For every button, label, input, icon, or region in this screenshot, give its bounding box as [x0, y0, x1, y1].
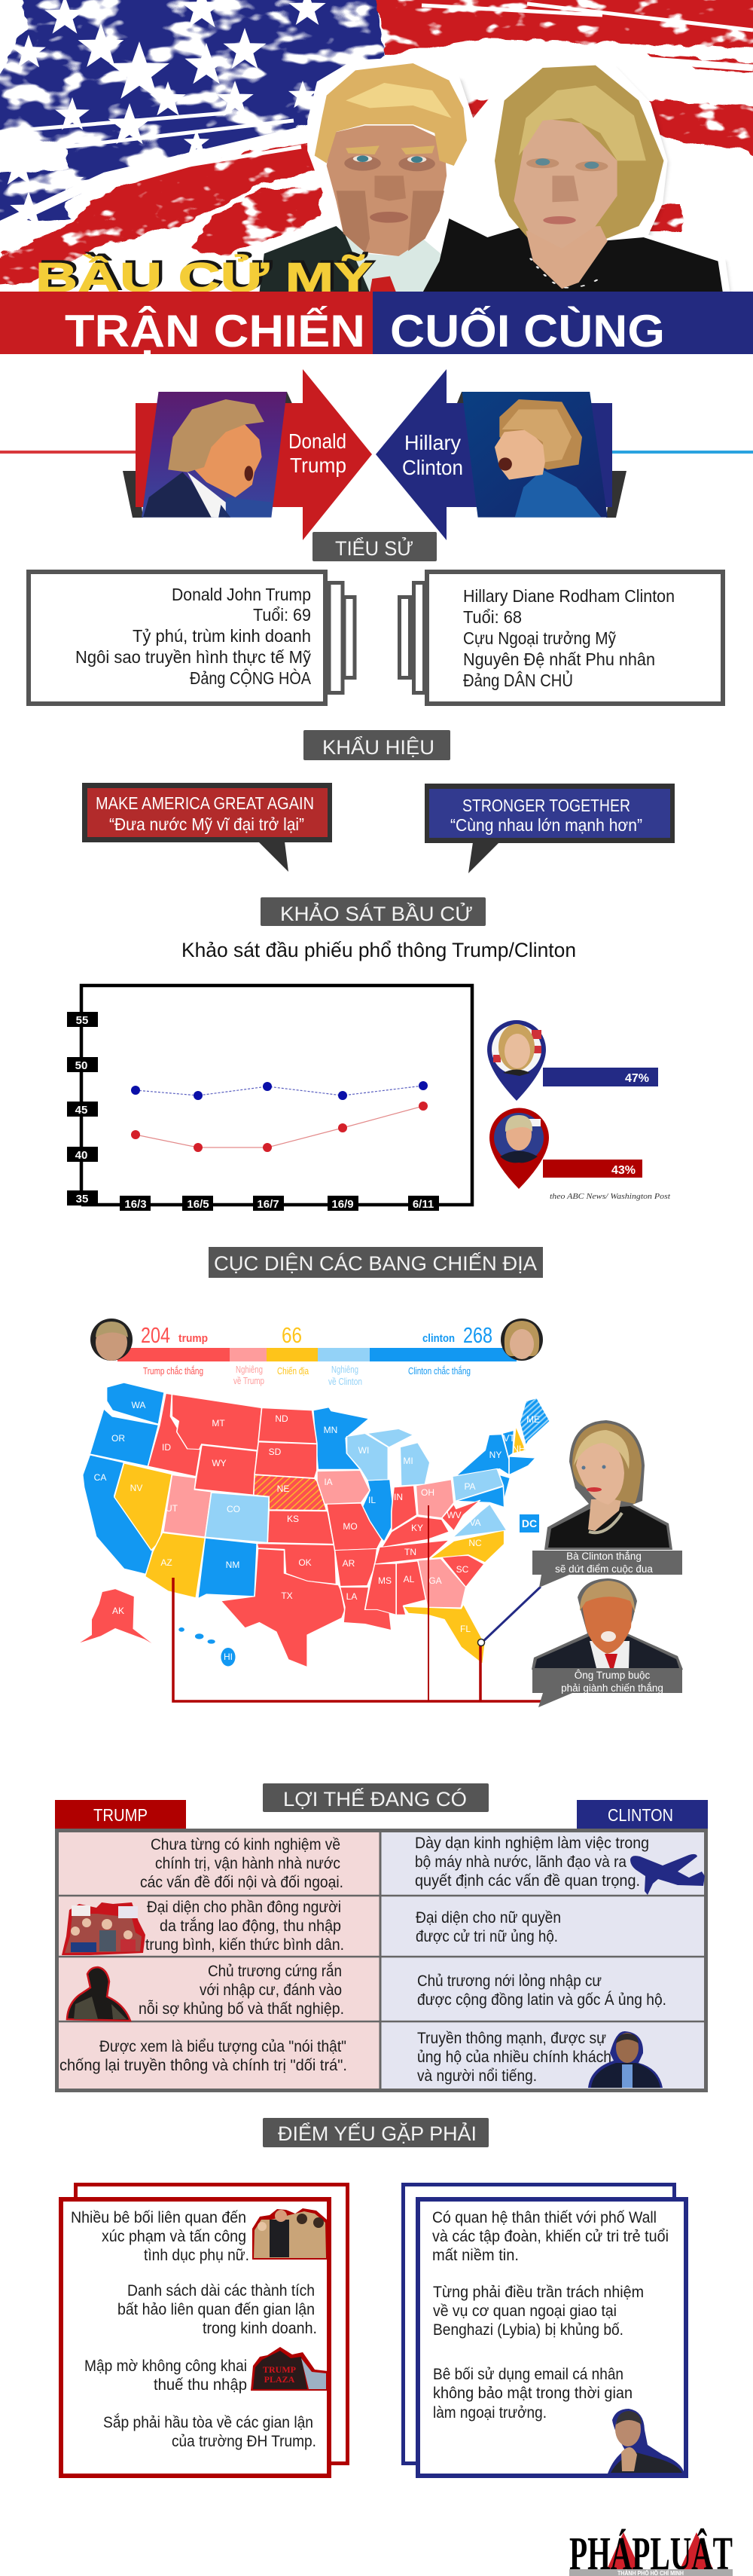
panel: Trump weaknesses: của trường ĐH Trump. — [172, 2433, 316, 2450]
heading: ĐIỂM YẾU GẶP PHẢI: ĐIỂM YẾU GẶP PHẢI — [278, 2121, 477, 2145]
Trump advantage 2: Đại diện cho phần đông người — [147, 1899, 341, 1916]
callout: Trump slogan: MAKE AMERICA GREAT AGAIN — [96, 793, 314, 813]
callout: Trump must win — [532, 1669, 682, 1707]
title line: BẦU CỬ MỸ — [35, 252, 376, 301]
DC tile: DC — [522, 1517, 537, 1529]
panel: Trump weaknesses: xúc phạm và tấn công — [102, 2228, 246, 2245]
cutout: Clinton portrait — [544, 1420, 672, 1550]
Clinton face and hair — [495, 66, 663, 289]
callout: Clinton slogan: STRONGER TOGETHER — [462, 796, 630, 815]
Trump advantage 2: trung bình, kiến thức bình dân. — [145, 1936, 344, 1954]
state labels: AK — [112, 1606, 124, 1616]
Trump series — [131, 1102, 428, 1152]
panel: Clinton weaknesses: Có quan hệ thân thiết với phố Wall — [432, 2209, 657, 2226]
result: Trump pin and 43% bar: 43% — [611, 1164, 636, 1177]
x axis labels: 16/3 — [124, 1198, 147, 1211]
Trump advantage 3: với nhập cư, đánh vào — [200, 1982, 342, 1999]
y axis labels — [67, 1012, 98, 1205]
state labels: VT — [503, 1433, 515, 1444]
icon: Clinton avatar — [501, 1319, 543, 1361]
Trump suit, shirt and tie — [259, 226, 447, 292]
state labels: NV — [130, 1483, 142, 1493]
state labels: MT — [212, 1418, 225, 1429]
title line: BẦU CỬ MỸ: BẦU CỬ MỸ — [38, 252, 376, 298]
state labels: AZ — [160, 1557, 172, 1568]
state labels: WI — [358, 1445, 369, 1456]
Trump arrow with photo: Donald — [288, 429, 346, 453]
state labels: KY — [411, 1523, 423, 1533]
title banner: TRẬN CHIẾN / CUỐI CÙNG: CUỐI CÙNG — [390, 306, 665, 356]
panel: Clinton biography: Tuổi: 68 — [463, 607, 522, 627]
callout: Trump must win: Ông Trump buộc — [575, 1670, 651, 1681]
photo: Trump Plaza sign — [251, 2347, 328, 2391]
panel: Clinton biography: Cựu Ngoại trưởng Mỹ — [463, 628, 616, 648]
state labels: FL — [460, 1624, 471, 1634]
state labels: SD — [269, 1447, 282, 1457]
Trump advantage 4 — [59, 2038, 347, 2074]
Clinton advantage 2 — [416, 1909, 561, 1945]
legend: electoral vote bar: Nghiêng — [331, 1364, 358, 1375]
heading: CỤC DIỆN CÁC BANG CHIẾN ĐỊA — [209, 1247, 543, 1278]
Trump advantage 4: Được xem là biểu tượng của "nói thật" — [99, 2038, 346, 2055]
panel: Clinton weaknesses: Từng phải điều trần trách nhiệm — [433, 2284, 644, 2301]
source note: theo ABC News/ Washington Post — [550, 1192, 671, 1201]
legend: electoral vote bar: clinton — [422, 1332, 455, 1345]
state labels: NH — [512, 1444, 526, 1454]
Trump advantage 3: Chủ trương cứng rắn — [208, 1963, 342, 1980]
icon: Trump avatar — [90, 1319, 133, 1361]
photo: Trump supporters crowd — [62, 1902, 145, 1955]
callout: Trump must win: phải giành chiến thắng — [561, 1682, 663, 1694]
callout: Clinton slogan: “Cùng nhau lớn mạnh hơn” — [450, 815, 642, 835]
y axis labels: 55 — [76, 1014, 88, 1027]
panel: Trump biography — [29, 572, 355, 704]
x axis labels: 16/7 — [257, 1198, 279, 1211]
panel: Clinton biography: Nguyên Đệ nhất Phu nhân — [463, 649, 655, 669]
state labels: LA — [346, 1591, 357, 1602]
panel: Clinton weaknesses: về vụ cơ quan ngoại giao tại — [433, 2303, 617, 2320]
Trump face — [327, 126, 447, 256]
state labels: NC — [468, 1538, 482, 1548]
callout: Trump slogan — [82, 783, 332, 872]
panel: Clinton weaknesses: mất niềm tin. — [432, 2247, 519, 2264]
x axis labels: 6/11 — [413, 1198, 434, 1211]
callout: Clinton win: sẽ dứt điểm cuộc đua — [555, 1563, 653, 1575]
state labels: ND — [275, 1413, 288, 1424]
Clinton advantage 4 — [417, 2030, 611, 2085]
panel: Trump biography: Donald John Trump — [172, 585, 311, 604]
panel: Trump weaknesses: bất hảo liên quan đến gian lận — [117, 2301, 315, 2318]
Trump advantage 2: da trắng lao động, thu nhập — [160, 1917, 341, 1935]
panel: Clinton weaknesses: và các tập đoàn, khiến cử tri trẻ tuổi — [432, 2228, 669, 2245]
line chart: poll results — [67, 985, 472, 1211]
state labels: AR — [343, 1558, 355, 1569]
panel: Trump biography: Tỷ phú, trùm kinh doanh — [133, 626, 311, 646]
icon: Clinton profile photo — [462, 392, 608, 518]
state labels: OR — [111, 1433, 125, 1444]
result: Clinton pin and 47% bar — [487, 1020, 658, 1101]
Clinton advantage 1: quyết định các vấn đề quan trọng. — [415, 1872, 640, 1890]
DC tile — [520, 1514, 539, 1532]
state labels: ME — [526, 1414, 540, 1425]
state labels: WV — [447, 1510, 462, 1520]
panel: Trump weaknesses: thuế thu nhập — [154, 2376, 247, 2394]
heading: TIỂU SỬ — [312, 532, 437, 561]
state labels — [94, 1400, 540, 1662]
state labels: WA — [132, 1400, 145, 1410]
state labels: NM — [226, 1560, 239, 1570]
illustration: Trump and Clinton sticker portraits — [255, 57, 730, 294]
Clinton advantage 1: Dày dạn kinh nghiệm làm việc trong — [415, 1835, 649, 1852]
header banner: grunge American flag background — [0, 0, 753, 285]
callout: Clinton win — [532, 1551, 682, 1587]
heading: CỤC DIỆN CÁC BANG CHIẾN ĐỊA: CỤC DIỆN CÁC BANG CHIẾN ĐỊA — [214, 1251, 537, 1275]
y axis labels: 35 — [76, 1193, 88, 1205]
photo: Obama — [588, 2031, 663, 2088]
Clinton advantage 2: được cử tri nữ ủng hộ. — [416, 1928, 558, 1945]
state labels: PA — [464, 1481, 476, 1492]
connector lines from swing states to callouts — [173, 1505, 542, 1701]
y axis labels: 40 — [75, 1149, 87, 1162]
state labels: MN — [324, 1425, 337, 1435]
state labels: HI — [224, 1652, 233, 1662]
panel: Clinton weaknesses: làm ngoại trưởng. — [433, 2404, 547, 2422]
Clinton arrow with photo — [376, 369, 753, 540]
panel: Clinton weaknesses: Bê bối sử dụng email cá nhân — [433, 2366, 623, 2383]
icon: airplane — [630, 1854, 705, 1895]
photo: Trump with pageant contestants — [252, 2208, 328, 2260]
heading: ĐIỂM YẾU GẶP PHẢI — [263, 2118, 489, 2147]
title line: BẦU CỬ MỸ: BẦU CỬ MỸ — [35, 254, 373, 301]
legend: electoral vote bar: Trump chắc thắng — [143, 1365, 203, 1377]
panel: Trump weaknesses: tình dục phụ nữ. — [144, 2247, 249, 2264]
x axis labels: 16/9 — [331, 1198, 354, 1211]
heading: KHẢO SÁT BẦU CỬ — [261, 897, 486, 926]
state labels: CA — [94, 1472, 106, 1483]
photo: Trump Plaza sign: PLAZA — [264, 2374, 295, 2385]
panel: Trump biography: Tuổi: 69 — [253, 605, 311, 625]
Clinton advantage 1 — [415, 1835, 649, 1890]
legend: electoral vote bar: Nghiêng — [236, 1364, 263, 1375]
Trump advantage 1: chính trị, vận hành nhà nước — [155, 1855, 340, 1872]
photo: masked militant — [67, 1967, 130, 2021]
state labels: GA — [428, 1575, 442, 1586]
state labels: ID — [162, 1442, 171, 1453]
Trump hair — [315, 63, 467, 166]
Clinton suit — [422, 218, 723, 292]
callout: Clinton slogan — [425, 784, 675, 873]
Clinton advantage 3 — [417, 1972, 666, 2009]
x axis labels: 16/5 — [187, 1198, 209, 1211]
heading: KHẢO SÁT BẦU CỬ: KHẢO SÁT BẦU CỬ — [280, 901, 473, 925]
panel: Trump weaknesses: Sắp phải hầu tòa về các gian lận — [103, 2414, 313, 2431]
callout: Clinton win: Bà Clinton thắng — [566, 1551, 642, 1562]
legend: electoral vote bar: 268 — [463, 1324, 492, 1348]
Trump arrow with photo — [0, 369, 372, 540]
state labels: TN — [404, 1547, 416, 1557]
state labels: OH — [421, 1487, 434, 1498]
state labels: VA — [469, 1517, 481, 1528]
state labels: OK — [298, 1557, 312, 1568]
tab: CLINTON: CLINTON — [608, 1805, 673, 1825]
Trump advantage 3: nỗi sợ khủng bố và thất nghiệp. — [139, 2000, 344, 2018]
legend: electoral vote bar: 66 — [282, 1324, 302, 1348]
tab: TRUMP: TRUMP — [93, 1805, 148, 1825]
table: advantages — [56, 1830, 706, 2090]
panel: Clinton weaknesses — [404, 2185, 686, 2476]
state labels: NE — [277, 1484, 289, 1494]
heading: TIỂU SỬ: TIỂU SỬ — [335, 536, 413, 560]
state labels: MI — [403, 1456, 413, 1466]
state labels: TX — [281, 1591, 293, 1601]
heading: LỢI THẾ ĐANG CÓ — [263, 1783, 489, 1812]
legend: electoral vote bar: về Trump — [233, 1375, 264, 1386]
panel: Trump weaknesses: Mập mờ không công khai — [84, 2358, 247, 2375]
panel: Trump biography: Ngôi sao truyền hình thực tế Mỹ — [75, 647, 311, 667]
state labels: MS — [378, 1575, 392, 1586]
panel: Trump biography: Đảng CỘNG HÒA — [190, 668, 312, 688]
title banner: TRẬN CHIẾN / CUỐI CÙNG — [0, 292, 753, 356]
Clinton advantage 1: bộ máy nhà nước, lãnh đạo và ra — [415, 1853, 626, 1871]
state labels: IL — [368, 1495, 376, 1505]
panel: Trump weaknesses: Danh sách dài các thành tích — [127, 2282, 315, 2299]
y axis labels: 50 — [75, 1059, 87, 1072]
Trump advantage 2 — [145, 1899, 344, 1954]
Trump advantage 1: Chưa từng có kinh nghiệm về — [151, 1836, 340, 1853]
state labels: WY — [212, 1458, 227, 1468]
map: US states by electoral lean — [77, 1383, 550, 1667]
Trump advantage 1 — [140, 1836, 343, 1891]
tab: TRUMP — [55, 1800, 186, 1829]
cutout: Trump portrait — [532, 1578, 683, 1670]
panel: Clinton biography — [399, 572, 723, 704]
panel: Clinton weaknesses: không bảo mật trong thời gian — [433, 2385, 633, 2402]
Trump advantage 3 — [139, 1963, 344, 2018]
icon: Trump profile photo — [142, 392, 287, 518]
legend: electoral vote bar: Chiến địa — [277, 1365, 309, 1377]
state labels: KS — [287, 1514, 299, 1524]
Clinton advantage 3: được cộng đồng latin và gốc Á ủng hộ. — [417, 1991, 666, 2009]
state labels: IN — [394, 1492, 403, 1502]
photo: James Comey — [608, 2409, 684, 2474]
legend: electoral vote bar: về Clinton — [328, 1376, 362, 1387]
state labels: AL — [404, 1574, 415, 1584]
panel: Trump weaknesses: trong kinh doanh. — [203, 2320, 317, 2337]
legend: electoral vote bar: 204 — [141, 1324, 170, 1348]
panel: Clinton biography: Hillary Diane Rodham Clinton — [463, 586, 675, 606]
legend: electoral vote bar: Clinton chắc thắng — [408, 1365, 471, 1377]
state labels: CO — [227, 1504, 240, 1514]
Clinton advantage 3: Chủ trương nới lỏng nhập cư — [417, 1972, 602, 1990]
Trump advantage 4: chống lại truyền thông và chính trị "dối trá". — [59, 2057, 347, 2074]
panel: Clinton weaknesses: Benghazi (Lybia) bị khủng bố. — [433, 2321, 623, 2339]
Clinton advantage 4: và người nổi tiếng. — [417, 2067, 537, 2085]
callout: Trump slogan: “Đưa nước Mỹ vĩ đại trở lại” — [109, 814, 304, 834]
chart title: Khảo sát đầu phiếu phổ thông Trump/Clinton — [181, 939, 576, 961]
legend: electoral vote bar — [90, 1319, 543, 1387]
Clinton arrow with photo: Hillary — [404, 431, 461, 454]
result: Clinton pin and 47% bar: 47% — [625, 1072, 649, 1085]
Clinton arrow with photo: Clinton — [402, 456, 463, 479]
panel: Trump weaknesses: Nhiều bê bối liên quan đến — [71, 2209, 246, 2226]
Clinton advantage 4: Truyền thông mạnh, được sự — [417, 2030, 606, 2047]
state labels: NY — [489, 1450, 501, 1460]
Clinton series — [131, 1081, 428, 1100]
Clinton advantage 4: ủng hộ của nhiều chính khách — [417, 2049, 611, 2066]
Clinton advantage 2: Đại diện cho nữ quyền — [416, 1909, 561, 1927]
x axis labels — [120, 1196, 439, 1211]
Trump advantage 1: các vấn đề đối nội và đối ngoại. — [140, 1874, 343, 1891]
state labels: SC — [456, 1564, 469, 1575]
panel: Trump weaknesses — [61, 2185, 348, 2476]
title banner: TRẬN CHIẾN / CUỐI CÙNG: TRẬN CHIẾN — [65, 306, 365, 356]
y axis labels: 45 — [75, 1104, 87, 1117]
heading: KHẨU HIỆU — [303, 730, 450, 760]
result: Trump pin and 43% bar — [489, 1108, 642, 1189]
heading: LỢI THẾ ĐANG CÓ: LỢI THẾ ĐANG CÓ — [283, 1787, 467, 1811]
Trump arrow with photo: Trump — [290, 454, 346, 477]
tab: CLINTON — [577, 1800, 708, 1829]
photo: Trump Plaza sign: TRUMP — [263, 2364, 296, 2375]
state labels: IA — [324, 1477, 333, 1487]
panel: Clinton biography: Đảng DÂN CHỦ — [463, 669, 573, 690]
legend: electoral vote bar: trump — [178, 1332, 208, 1345]
state labels: UT — [166, 1503, 178, 1514]
heading: KHẨU HIỆU: KHẨU HIỆU — [322, 735, 434, 759]
state labels: MO — [343, 1521, 358, 1532]
